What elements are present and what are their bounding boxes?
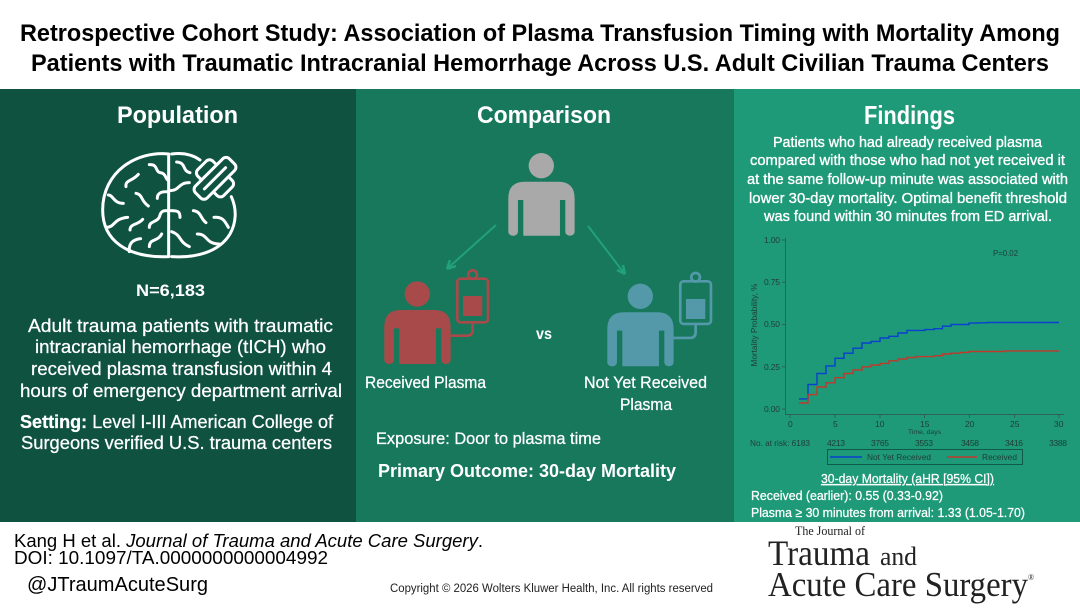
title: Patients with Traumatic Intracranial Hemorrhage Across U.S. Adult Civilian Trauma Centers	[31, 50, 1049, 77]
panel: comparison	[356, 89, 734, 522]
copyright: Copyright © 2026 Wolters Kluwer Health, Inc. All rights reserved	[390, 583, 713, 595]
label: not yet received plasma: Not Yet Received	[584, 373, 707, 392]
chart: cumulative mortality: Time, days	[908, 429, 942, 436]
title	[20, 20, 1060, 77]
chart: cumulative mortality: 3388	[1049, 438, 1067, 448]
findings summary: was found within 30 minutes from ED arrival.	[763, 208, 1052, 225]
journal logo	[768, 523, 1034, 604]
chart: cumulative mortality: 3765	[871, 438, 889, 448]
journal logo: and	[880, 542, 917, 571]
findings summary: lower 30-day mortality. Optimal benefit threshold	[749, 190, 1067, 207]
mortality results: Plasma ≥ 30 minutes from arrival: 1.33 (1.05-1.70)	[751, 505, 1025, 520]
findings summary: at the same follow-up minute was associated with	[747, 171, 1068, 188]
population description: hours of emergency department arrival	[20, 381, 342, 401]
label: not yet received plasma	[584, 373, 707, 414]
label: received plasma: Received Plasma	[365, 373, 486, 392]
chart: cumulative mortality: 25	[1010, 419, 1020, 429]
findings summary	[747, 134, 1068, 225]
journal logo: Trauma	[768, 533, 870, 573]
chart: cumulative mortality: 0.25	[764, 362, 780, 372]
chart: cumulative mortality: 10	[875, 419, 885, 429]
population description: intracranial hemorrhage (tICH) who	[35, 337, 326, 357]
chart: cumulative mortality: 4213	[827, 438, 845, 448]
arrow: to not yet received	[588, 226, 625, 274]
exposure: Exposure: Door to plasma time	[376, 429, 601, 448]
chart: cumulative mortality: 0.50	[764, 319, 780, 329]
primary outcome: Primary Outcome: 30-day Mortality	[378, 461, 676, 481]
heading: findings: Findings	[864, 100, 955, 130]
chart: cumulative mortality: P=0.02	[993, 248, 1018, 258]
panel: population	[0, 89, 356, 522]
citation: Kang H et al. Journal of Trauma and Acute Care Surgery .	[14, 531, 483, 551]
arrow: to received	[447, 225, 496, 269]
icon: grey patient	[508, 153, 575, 236]
population description: Adult trauma patients with traumatic	[28, 316, 333, 336]
journal logo: The Journal of	[795, 523, 866, 538]
mortality results: Received (earlier): 0.55 (0.33-0.92)	[751, 488, 943, 503]
chart: cumulative mortality: Received	[982, 452, 1017, 462]
panel: findings	[734, 89, 1080, 522]
icon: patient not yet receiving plasma	[607, 273, 711, 366]
setting: Setting: Level I-III American College of	[20, 412, 334, 432]
chart: cumulative mortality: Not Yet Received	[867, 452, 931, 462]
heading: comparison: Comparison	[477, 102, 611, 129]
journal logo: ®	[1028, 573, 1034, 582]
chart: cumulative mortality	[749, 235, 1067, 464]
citation	[14, 531, 483, 568]
vs label: vs	[536, 326, 552, 343]
chart: cumulative mortality: 3553	[915, 438, 933, 448]
chart: cumulative mortality: 0	[788, 419, 793, 429]
mortality results: 30-day Mortality (aHR [95% CI])	[821, 471, 994, 486]
chart: cumulative mortality: No. at risk: 6183	[750, 438, 810, 448]
citation: DOI: 10.1097/TA.0000000000004992	[14, 548, 328, 568]
icon: brain with bandage	[103, 148, 245, 257]
label: not yet received plasma: Plasma	[620, 395, 672, 414]
chart: cumulative mortality: 5	[833, 419, 838, 429]
chart: cumulative mortality: 0.75	[764, 277, 780, 287]
chart: cumulative mortality: 30	[1054, 419, 1064, 429]
chart: cumulative mortality: 20	[965, 419, 975, 429]
setting	[20, 412, 334, 453]
icon: patient receiving plasma	[384, 270, 488, 364]
population description: received plasma transfusion within 4	[31, 359, 332, 379]
chart: cumulative mortality: Mortality Probability, %	[749, 283, 759, 366]
chart: cumulative mortality: 1.00	[764, 235, 780, 245]
mortality results	[751, 471, 1025, 520]
findings summary: Patients who had already received plasma	[773, 134, 1043, 151]
title: Retrospective Cohort Study: Association of Plasma Transfusion Timing with Mortality Among	[20, 20, 1060, 47]
heading: population: Population	[117, 102, 238, 129]
chart: cumulative mortality: 3416	[1005, 438, 1023, 448]
population description	[20, 316, 342, 401]
journal handle: @JTraumAcuteSurg	[27, 574, 208, 596]
setting: Surgeons verified U.S. trauma centers	[21, 433, 332, 453]
chart: cumulative mortality: 0.00	[764, 404, 780, 414]
journal logo: Acute Care Surgery	[768, 565, 1028, 604]
sample size: N=6,183	[136, 281, 205, 300]
chart: cumulative mortality: 15	[920, 419, 930, 429]
findings summary: compared with those who had not yet received it	[750, 152, 1066, 169]
chart: cumulative mortality: 3458	[961, 438, 979, 448]
